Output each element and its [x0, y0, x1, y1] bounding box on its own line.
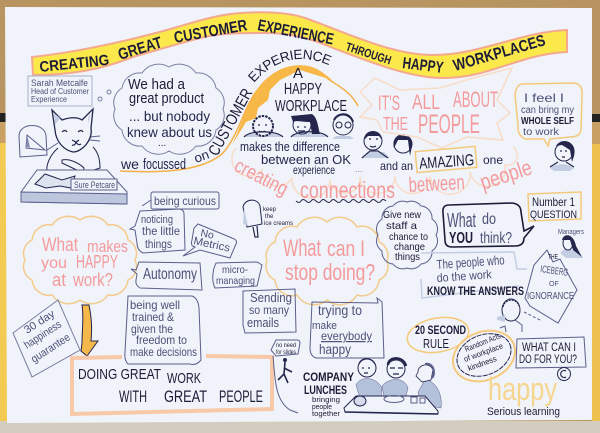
label: noticing the little things — [130, 209, 185, 253]
bubble: give new staff a chance: change — [394, 241, 425, 253]
title banner: HAPPY — [402, 55, 445, 77]
heading: creating connections between people: creating — [231, 155, 292, 200]
label: being well trained: make decisions — [130, 345, 197, 359]
thought bubble: great product: great product — [129, 90, 205, 107]
box: doing great work with great people: GREAT — [164, 387, 207, 406]
icon: person thinking — [550, 141, 575, 171]
label: number 1 question: Number 1 — [532, 195, 575, 209]
label: sending so many emails — [243, 289, 296, 333]
quote: whole self to work: WHOLE SELF — [521, 115, 574, 127]
label: know the answers: do the work — [436, 267, 493, 285]
quote: whole self to work — [515, 83, 582, 146]
cloud: what makes you happy at work: What — [42, 235, 79, 256]
cloud: a happy workplace: between an OK — [261, 152, 351, 167]
cloud: what makes you happy at work: makes — [87, 237, 128, 256]
cloud: what makes you happy at work: HAPPY — [76, 252, 118, 272]
icon: manager on top — [560, 235, 583, 258]
cloud: 20 second rule: 20 SECOND — [415, 323, 466, 337]
cloud: 20 second rule: RULE — [423, 336, 449, 351]
heading: creating connections between people: between — [408, 171, 465, 197]
speech bubble: what do you think: think? — [480, 230, 512, 247]
note: 30 day happiness guarantee — [13, 300, 80, 377]
label: being well trained: given the — [131, 322, 173, 336]
flow line: we focussed on customer experience: EXPERIENCE — [248, 50, 332, 82]
label: being well trained: trained & — [132, 310, 174, 324]
quote: whole self to work: I feel I — [524, 91, 564, 105]
label: trying to make everybody happy — [310, 298, 384, 358]
thought bubble: great product — [98, 64, 224, 154]
title banner: WORKPLACES — [451, 32, 548, 75]
spiky callout: it's all about the people: ALL — [412, 91, 440, 114]
bubble: give new staff a chance: things — [395, 251, 420, 263]
label: autonomy: Autonomy — [143, 266, 197, 283]
label: company lunches — [303, 372, 354, 418]
flow line: we focussed on customer experience: CUSTOMER — [206, 86, 256, 159]
label: micro-managing — [213, 262, 262, 288]
cloud: what can I stop doing — [266, 217, 388, 305]
label: micro-managing: managing — [216, 275, 255, 287]
label: being well trained: freedom to — [136, 333, 187, 347]
arrow: happy to doing great work — [81, 305, 98, 356]
label: sending so many emails: Sending — [250, 291, 292, 305]
diagram: iceberg of ignorance: THE — [548, 254, 558, 261]
cloud: random acts of workplace kindness — [445, 322, 523, 390]
flow line: we focussed on customer experience: focussed — [143, 156, 186, 173]
spiky callout: it's all about the people: ABOUT — [453, 87, 498, 112]
bubble: give new staff a chance: staff a — [386, 220, 417, 232]
illustration: people at lunch table — [344, 358, 441, 414]
label: noticing the little things: the little — [142, 224, 180, 238]
text: and an amazing one: and an — [380, 159, 413, 173]
spiky callout: it's all about the people — [360, 68, 512, 148]
title banner: THROUGH — [344, 40, 393, 67]
label: micro-managing: micro- — [222, 265, 248, 276]
box: doing great work with great people: WORK — [167, 370, 201, 387]
cloud: what makes you happy at work: at — [52, 270, 66, 290]
text: and an amazing one: one — [483, 153, 503, 167]
label: company lunches: bringing — [312, 397, 340, 404]
icon: ice cream — [243, 200, 293, 237]
diagram: iceberg of ignorance — [525, 229, 584, 323]
speech bubble: what do you think: YOU — [449, 230, 473, 247]
label: number 1 question: QUESTION — [530, 209, 577, 221]
label: number 1 question — [528, 192, 581, 221]
stick figure with no need for slides — [271, 340, 300, 413]
heading: creating connections between people: connections — [300, 177, 395, 203]
stick figure with no need for slides: for slides — [276, 350, 296, 356]
label: noticing the little things: things — [145, 237, 172, 251]
note: 30 day happiness guarantee: 30 day — [22, 308, 58, 337]
label: company lunches: COMPANY — [303, 372, 354, 384]
label: trying to make everybody happy: everybody — [321, 329, 372, 343]
thought bubble: great product: ... but nobody — [129, 108, 210, 124]
label: know the answers: KNOW THE ANSWERS — [427, 284, 524, 298]
diagram: iceberg of ignorance: IGNORANCE — [527, 291, 574, 302]
name label: Sarah Metcalfe: Head of Customer — [31, 87, 89, 96]
label: what can I do for you — [516, 337, 586, 368]
icon: ice cream: ice creams — [264, 221, 293, 227]
label: noticing the little things: noticing — [141, 214, 173, 226]
title banner: GREAT — [116, 34, 164, 64]
title banner — [32, 12, 567, 78]
cloud: a happy workplace: experience — [293, 163, 335, 177]
name label: Sarah Metcalfe: Sarah Metcalfe — [31, 78, 88, 88]
label: trying to make everybody happy: trying to — [318, 302, 362, 318]
cloud: what can I stop doing: What — [283, 235, 321, 262]
cloud: what can I stop doing: can I — [327, 236, 365, 261]
label: being curious — [142, 192, 219, 209]
icon: ice cream: keep — [263, 207, 277, 213]
name plate: Sure Petcare: Sure Petcare — [74, 180, 115, 190]
quote: whole self to work: can bring my — [521, 105, 574, 116]
label: company lunches: people — [312, 404, 332, 411]
name label: Sarah Metcalfe: Experience — [31, 95, 67, 104]
label: know the answers: The people who — [436, 252, 505, 272]
cloud: random acts of workplace kindness: kindness — [467, 354, 498, 373]
speech bubble: what do you think — [443, 203, 534, 247]
label: being well trained — [125, 296, 201, 364]
bubble: give new staff a chance: Give new — [383, 209, 421, 221]
cloud: what makes you happy at work: work? — [72, 270, 113, 290]
spiky callout: it's all about the people: PEOPLE — [418, 109, 480, 139]
title banner: CUSTOMER — [173, 17, 249, 47]
note: 30 day happiness guarantee: guarantee — [29, 331, 73, 366]
thought bubble: great product: ... — [158, 138, 166, 149]
cloud: 20 second rule — [405, 313, 471, 357]
label: being well trained: being well — [130, 298, 180, 312]
icon: ice cream: the — [265, 214, 274, 220]
spiky callout: it's all about the people: THE — [383, 114, 408, 134]
label: no metrics: Metrics — [192, 235, 232, 255]
thought bubble: great product: We had a — [128, 76, 186, 93]
label: sending so many emails: so many — [249, 303, 289, 317]
cloud: a happy workplace: WORKPLACE — [275, 98, 347, 115]
icon: cat at desk with window — [19, 109, 127, 204]
label: trying to make everybody happy: make — [312, 320, 337, 332]
flow line: we focussed on customer experience: we — [120, 156, 139, 172]
label: being curious: being curious — [154, 194, 216, 208]
label: what can I do for you: DO FOR YOU? — [519, 354, 577, 366]
bubble: give new staff a chance: chance to — [389, 231, 428, 243]
title banner: EXPERIENCE — [256, 17, 335, 49]
cloud: a happy workplace: A — [293, 65, 303, 82]
box: doing great work with great people: DOING GREAT — [78, 366, 161, 383]
cloud: a happy workplace: makes the difference — [240, 139, 340, 154]
diagram: iceberg of ignorance: Managers — [558, 229, 584, 236]
diagram: iceberg of ignorance: ICEBERG — [540, 264, 569, 279]
text: and an amazing one: AMAZING — [419, 152, 475, 173]
text: and an amazing one — [380, 146, 503, 173]
icon: worker below iceberg — [497, 299, 540, 332]
label: sending so many emails: emails — [247, 315, 279, 330]
heading: creating connections between people: people — [477, 155, 535, 195]
logo: happy serious learning: happy — [488, 371, 557, 407]
label: company lunches: LUNCHES — [304, 385, 347, 397]
logo: happy serious learning — [487, 371, 560, 418]
title banner: CREATING — [39, 52, 110, 76]
label: what can I do for you: WHAT CAN I — [522, 342, 576, 354]
label: trying to make everybody happy: happy — [319, 341, 351, 357]
label: know the answers — [421, 252, 527, 298]
diagram: iceberg of ignorance: OF — [549, 281, 559, 288]
box: doing great work with great people — [72, 356, 272, 414]
label: no metrics: No — [199, 227, 215, 242]
name label: Sarah Metcalfe — [28, 76, 92, 106]
stick figure with no need for slides: no need — [276, 343, 296, 349]
cloud: random acts of workplace kindness: of workplace — [463, 341, 505, 364]
icon: copyright circle — [558, 368, 570, 380]
cloud: what can I stop doing: stop doing? — [285, 259, 375, 285]
box: doing great work with great people: PEOPLE — [219, 387, 263, 406]
note: 30 day happiness guarantee: happiness — [22, 318, 64, 352]
bubble: give new staff a chance — [376, 201, 438, 269]
label: no metrics — [183, 224, 236, 258]
speech bubble: what do you think: What — [447, 210, 476, 232]
cloud: what makes you happy at work: you — [41, 255, 67, 272]
label: company lunches: together — [312, 411, 341, 418]
speech bubble: what do you think: do — [482, 211, 496, 228]
cloud: a happy workplace: ... — [355, 164, 363, 174]
cloud: what makes you happy at work — [24, 216, 136, 304]
label: autonomy — [131, 262, 202, 290]
cloud: a happy workplace: HAPPY — [284, 81, 322, 98]
quote: whole self to work: to work — [523, 127, 560, 138]
box: doing great work with great people: WITH — [119, 387, 147, 406]
icon: people in workplace — [244, 114, 412, 158]
thought bubble: great product: knew about us — [127, 124, 212, 140]
logo: happy serious learning: Serious learning — [487, 406, 560, 418]
cloud: a happy workplace — [232, 65, 517, 198]
flow line: we focussed on customer experience: on — [192, 147, 211, 166]
spiky callout: it's all about the people: IT'S — [378, 92, 400, 115]
heading: creating connections between people — [231, 155, 535, 203]
cloud: random acts of workplace kindness: Random Acts — [463, 331, 502, 354]
wavy underline — [296, 200, 386, 202]
flow line: we focussed on customer experience — [120, 50, 359, 173]
